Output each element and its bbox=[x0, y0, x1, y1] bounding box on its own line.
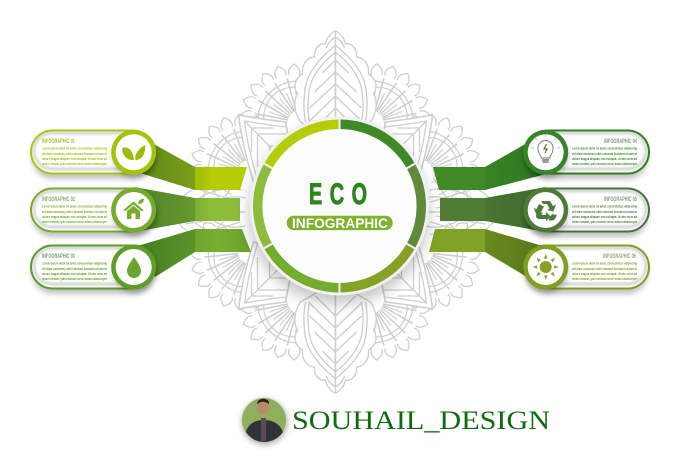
text 03: INFOGRAPHIC 03 bbox=[42, 253, 75, 260]
author name: SOUHAIL_DESIGN bbox=[292, 406, 550, 435]
text 02: Lorem ipsum dolor sit amet, consectetuer adipiscing bbox=[42, 204, 107, 208]
text 04 bbox=[572, 138, 638, 166]
item 04 bbox=[523, 130, 649, 179]
text 03: Lorem ipsum dolor sit amet, consectetuer adipiscing bbox=[42, 262, 107, 266]
icon: sun bbox=[533, 254, 559, 280]
subtitle pill: INFOGRAPHIC bbox=[292, 215, 388, 231]
text 02: INFOGRAPHIC 02 bbox=[42, 196, 75, 203]
text 05: INFOGRAPHIC 05 bbox=[604, 196, 637, 203]
text 06 bbox=[572, 253, 638, 281]
item 06 bbox=[523, 244, 649, 294]
item 01 bbox=[31, 130, 157, 179]
text 01: Lorem ipsum dolor sit amet, consectetuer adipiscing bbox=[42, 146, 107, 150]
text 04: INFOGRAPHIC 04 bbox=[604, 138, 637, 145]
badge 03 bbox=[111, 244, 157, 293]
text 02: minim veniam, quis nostrud exerci tution ullamcorper bbox=[42, 220, 107, 224]
text 04: Lorem ipsum dolor sit amet, consectetuer adipiscing bbox=[572, 146, 637, 150]
central circle shadow bbox=[249, 124, 429, 304]
ring segment 2 bbox=[340, 120, 414, 168]
text 01 bbox=[42, 138, 108, 166]
text 03: minim veniam, quis nostrud exerci tution ullamcorper bbox=[42, 277, 107, 281]
badge 01 bbox=[111, 130, 157, 178]
mandala decoration bbox=[169, 31, 502, 393]
text 01: minim veniam, quis nostrud exerci tution ullamcorper bbox=[42, 162, 107, 166]
right connector bands bbox=[429, 142, 546, 277]
text 05: elit diam nonummy nibh euismod tincidunt ut laoreet bbox=[572, 210, 638, 214]
text 02: elit diam nonummy nibh euismod tincidunt ut laoreet bbox=[42, 210, 108, 214]
ring segment 5 bbox=[265, 244, 338, 292]
central circle bbox=[250, 116, 429, 296]
pill 01 bbox=[31, 130, 154, 179]
text 04: elit diam nonummy nibh euismod tincidunt ut laoreet bbox=[572, 152, 638, 156]
icon: recycle bbox=[534, 201, 557, 221]
text 05 bbox=[572, 196, 638, 224]
author avatar bbox=[242, 398, 288, 445]
badge 06 bbox=[523, 244, 568, 293]
ring segment 4 bbox=[340, 244, 414, 292]
pill 02 bbox=[31, 188, 154, 237]
text 01: elit diam nonummy nibh euismod tincidunt ut laoreet bbox=[42, 152, 108, 156]
text 02 bbox=[42, 196, 108, 224]
icon: water drop bbox=[127, 257, 141, 278]
ring segment 6 bbox=[253, 164, 272, 248]
badge 05 bbox=[523, 188, 568, 236]
text 06: elit diam nonummy nibh euismod tincidunt ut laoreet bbox=[572, 267, 638, 271]
text 01: dolore magna aliquam erat volutpat. Ut wisi enim ad bbox=[42, 157, 108, 161]
icon: house bbox=[124, 198, 144, 219]
text 06: dolore magna aliquam erat volutpat. Ut wisi enim ad bbox=[572, 272, 638, 276]
text 02: dolore magna aliquam erat volutpat. Ut wisi enim ad bbox=[42, 215, 108, 219]
text 06: INFOGRAPHIC 06 bbox=[603, 253, 636, 260]
text 06: Lorem ipsum dolor sit amet, consectetuer adipiscing bbox=[572, 262, 637, 266]
icon: leaves bbox=[122, 145, 145, 160]
item 02 bbox=[31, 188, 157, 237]
badge 04 bbox=[523, 130, 568, 178]
text 05: Lorem ipsum dolor sit amet, consectetuer adipiscing bbox=[572, 204, 637, 208]
pill 04 bbox=[526, 130, 649, 179]
icon: light bulb bbox=[531, 134, 560, 162]
ring segment 1 bbox=[265, 120, 338, 168]
text 05: minim veniam, quis nostrud exerci tution ullamcorper bbox=[572, 220, 637, 224]
text 03: elit diam nonummy nibh euismod tincidunt ut laoreet bbox=[42, 267, 108, 271]
left connector bands bbox=[134, 137, 251, 277]
badge 02 bbox=[111, 188, 157, 236]
text 05: dolore magna aliquam erat volutpat. Ut wisi enim ad bbox=[572, 215, 638, 219]
text 03: dolore magna aliquam erat volutpat. Ut wisi enim ad bbox=[42, 272, 108, 276]
pill 05 bbox=[526, 188, 649, 237]
text 06: minim veniam, quis nostrud exerci tution ullamcorper bbox=[572, 277, 637, 281]
text 04: minim veniam, quis nostrud exerci tution ullamcorper bbox=[572, 162, 637, 166]
item 05 bbox=[523, 188, 649, 237]
pill 03 bbox=[31, 246, 154, 294]
text 01: INFOGRAPHIC 01 bbox=[42, 138, 75, 145]
pill 06 bbox=[526, 246, 649, 294]
ring segment 3 bbox=[407, 164, 426, 248]
item 03 bbox=[31, 244, 157, 294]
text 04: dolore magna aliquam erat volutpat. Ut wisi enim ad bbox=[572, 157, 638, 161]
title ECO: ECO bbox=[309, 178, 375, 211]
text 03 bbox=[42, 253, 108, 281]
